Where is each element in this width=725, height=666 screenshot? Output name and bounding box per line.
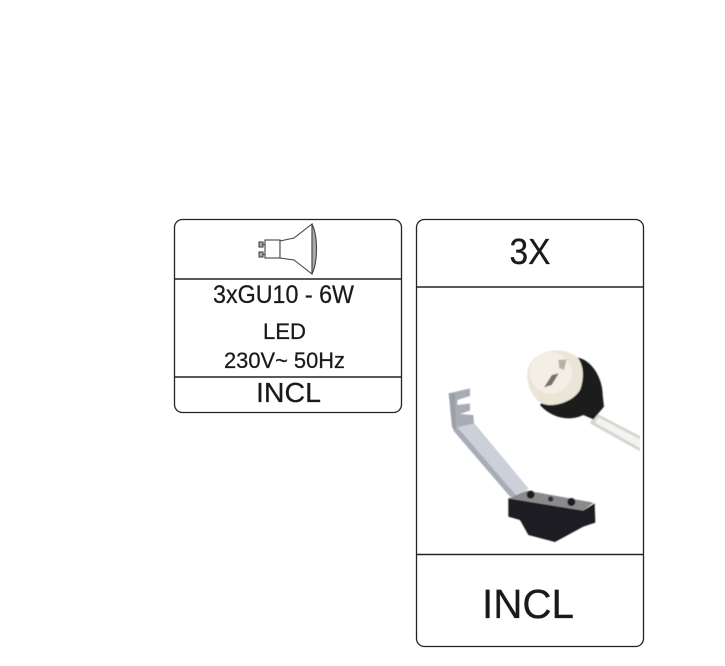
cable [590,413,640,451]
text: INCL: INCL [482,581,574,627]
panel: lamp holder [416,220,644,646]
text: voltage: 230V~ 50Hz [224,348,345,373]
base block [508,498,595,542]
base top [508,491,593,511]
icon: GU10 bulb [259,224,316,274]
text: LED: LED [263,319,306,344]
panel: lamp specification [174,220,402,412]
text: quantity: 3X [510,231,550,272]
text: lamp type: 3xGU10 - 6W [213,281,354,309]
socket ceramic [527,350,583,405]
socket back [540,357,604,419]
bracket [449,388,528,497]
photo: holder and bracket [449,345,640,542]
text: INCL: INCL [256,377,321,408]
